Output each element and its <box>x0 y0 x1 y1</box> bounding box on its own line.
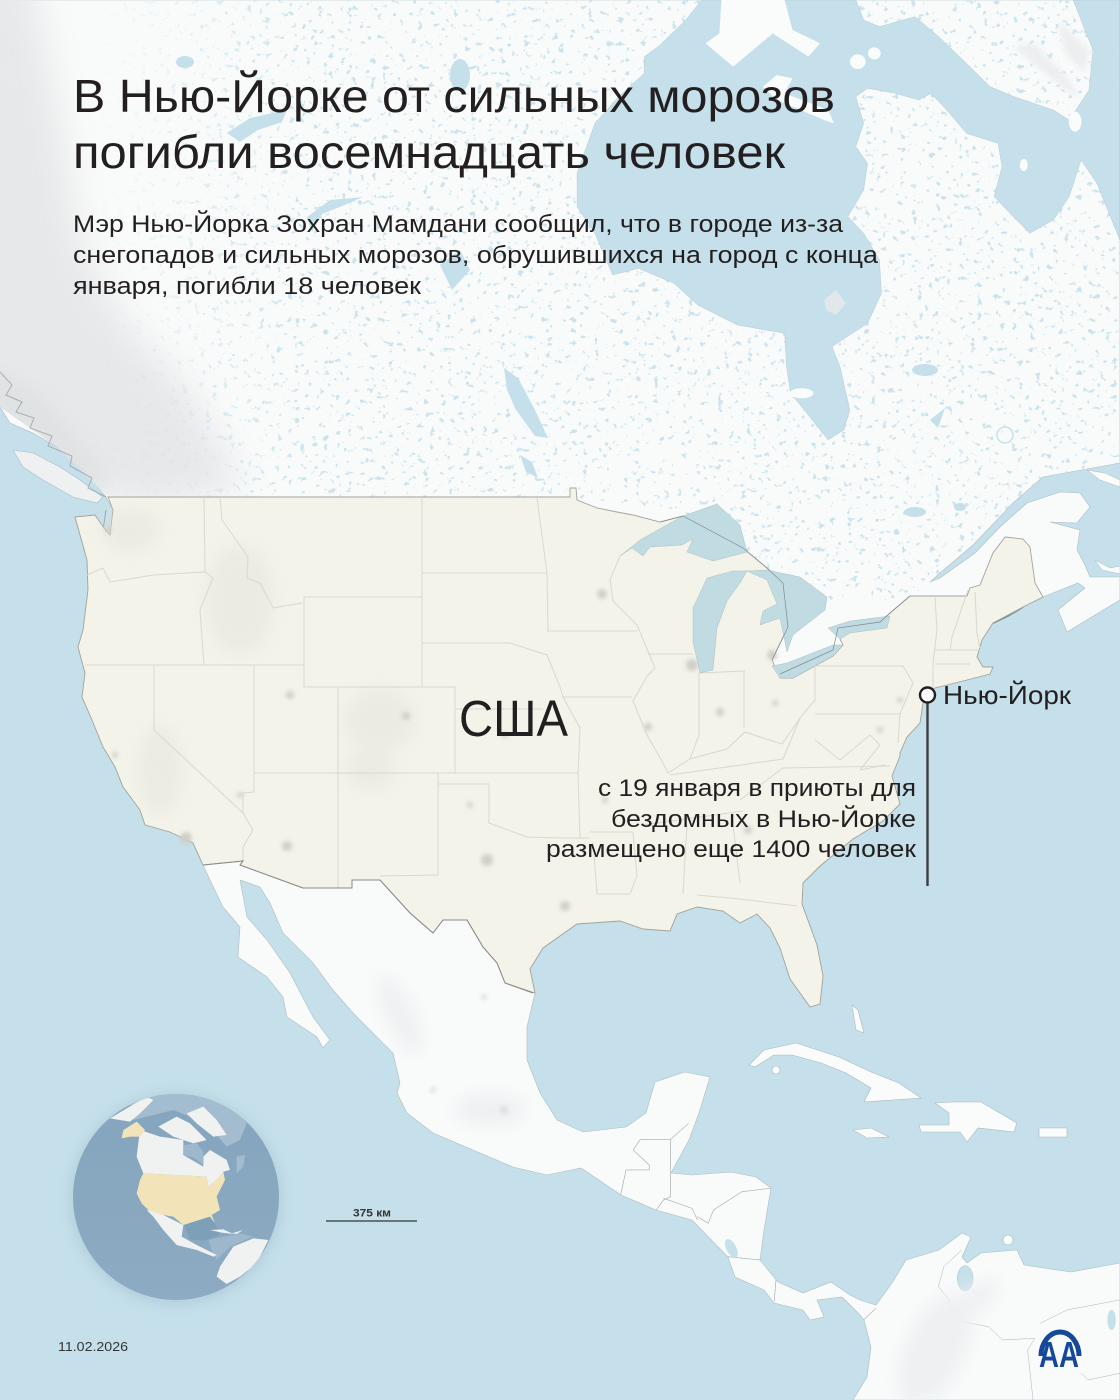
subtitle text block: Мэр Нью-Йорка Зохран Мамдани сообщил, что в городе из-за <box>73 210 843 238</box>
map: islands near the Gulf of St. Lawrence <box>1087 470 1120 574</box>
map: city patches in Mexico <box>430 994 508 1114</box>
subtitle text block: снегопадов и сильных морозов, обрушившихся на город с конца <box>73 242 878 269</box>
map: western mountain shading <box>0 0 245 510</box>
city label: New York: Нью-Йорк <box>943 680 1072 710</box>
callout text: shelters: бездомных в Нью-Йорке <box>611 805 916 833</box>
scale bar <box>326 1208 417 1221</box>
date: 11.02.2026 <box>58 1340 128 1354</box>
scale bar: 375 км <box>353 1208 391 1220</box>
subtitle text block: января, погибли 18 человек <box>73 273 421 300</box>
map: United States shape <box>75 488 1043 1007</box>
callout text: shelters: размещено еще 1400 человек <box>546 836 916 863</box>
logo: Anadolu Agency: AA <box>1039 1334 1079 1375</box>
map: Caribbean islands <box>749 1005 1067 1245</box>
callout text: shelters: с 19 января в приюты для <box>598 775 916 802</box>
map: Hudson Bay and Hudson Strait <box>577 0 1120 440</box>
map: Baffin Island relief <box>1014 20 1089 100</box>
map: Vancouver Island <box>13 450 103 503</box>
subtitle text block <box>73 210 878 300</box>
title <box>73 70 835 178</box>
map: rugged coast marks <box>0 372 1023 772</box>
map: US state borders <box>85 498 980 906</box>
map: Central American and South American borders <box>621 1123 1120 1400</box>
callout text: shelters <box>546 775 916 863</box>
map: terrain shading and city patches in the USA <box>100 508 903 911</box>
map: larger Canadian lakes <box>176 56 1013 517</box>
map: Mexico–USA border <box>203 861 533 993</box>
locator globe <box>71 1093 281 1304</box>
map: Great Lakes <box>620 504 890 678</box>
map: Canada–USA border through the lakes <box>660 516 910 674</box>
map: scattered lakes of Canada <box>129 0 1120 600</box>
callout: New York marker and leader line <box>920 688 935 886</box>
title: погибли восемнадцать человек <box>73 126 786 178</box>
map: terrain shading in Mexico and South America <box>370 971 1004 1400</box>
title: В Нью-Йорке от сильных морозов <box>73 70 835 122</box>
country label: USA: США <box>459 690 568 747</box>
